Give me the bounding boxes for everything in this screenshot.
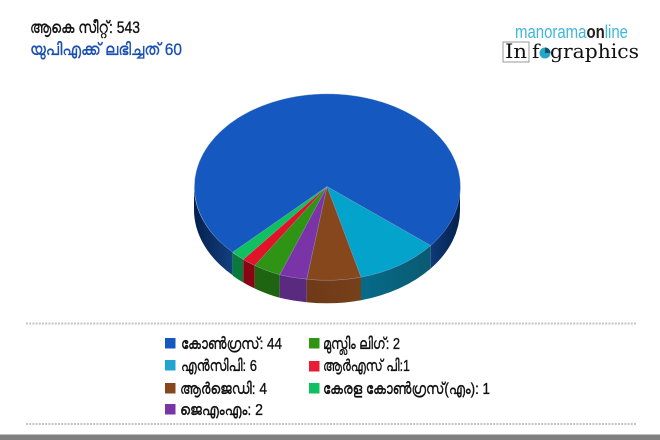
logo wordmark: manoramaonline (515, 22, 628, 42)
legend: RSP (309, 358, 410, 375)
top slices (194, 94, 460, 280)
legend: NCP (165, 358, 257, 375)
total seats line: ആകെ സീറ്റ്: 543 (30, 18, 140, 38)
slice: JMM 2 (280, 186, 327, 279)
slice: RSP 1 (243, 186, 327, 266)
header text (30, 18, 182, 60)
legend: Muslim League (309, 336, 400, 356)
slice: RJD 4 (307, 186, 361, 280)
logo o dot (540, 48, 550, 58)
legend: NCP: എൻസിപി: 6 (181, 358, 257, 375)
UPA seats line: യുപിഎക്ക് ലഭിച്ചത് 60 (30, 40, 182, 60)
slice: Congress 44 (194, 94, 460, 252)
bottom bar (0, 434, 660, 440)
logo In box (503, 42, 529, 62)
pie chart 3D (194, 94, 460, 303)
logo f: f (532, 39, 541, 63)
legend (165, 336, 490, 419)
legend: RSP: ആർഎസ് പി:1 (323, 358, 410, 375)
legend: RJD: ആർജെഡി: 4 (180, 381, 267, 398)
slice: Kerala Congress M 1 (233, 186, 327, 260)
logo: manoramaonline infographics (503, 22, 639, 63)
logo In text: In (505, 39, 527, 63)
legend: Muslim League: മുസ്ലിം ലിഗ്: 2 (323, 336, 400, 356)
slice: Muslim League 2 (255, 186, 327, 275)
legend: JMM: ജെഎംഎം: 2 (180, 402, 263, 419)
legend: Kerala Congress M: കേരള കോൺഗ്രസ്(എം): 1 (323, 381, 490, 398)
logo graphics text: graphics (550, 39, 639, 63)
side walls (194, 186, 460, 303)
slice: NCP 6 (327, 186, 431, 277)
legend: Congress: കോൺഗ്രസ്: 44 (181, 336, 282, 353)
